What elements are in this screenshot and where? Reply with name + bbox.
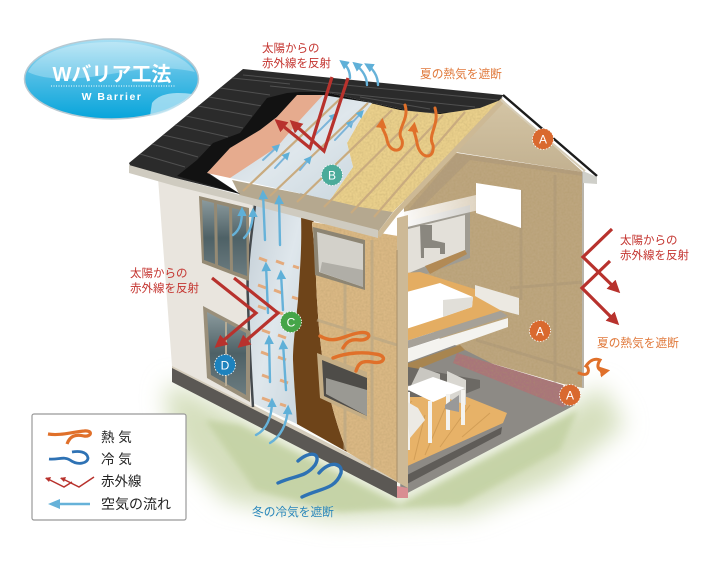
upper window xyxy=(199,196,249,281)
label: roof infrared reflection: 赤外線を反射 xyxy=(262,56,331,70)
ground: grass shadow xyxy=(165,382,625,520)
shingles xyxy=(129,69,503,194)
upper room xyxy=(404,205,470,282)
translucent upper wall layer xyxy=(252,200,312,250)
label: winter cold: 冬の冷気を遮断 xyxy=(252,505,334,519)
floor plate beam xyxy=(403,318,508,364)
air flow arrows xyxy=(233,62,378,443)
dim wood behind xyxy=(403,345,465,375)
foam insulated wall xyxy=(312,222,398,482)
chair xyxy=(420,225,445,258)
marker A middle: A xyxy=(536,324,544,338)
room floor 2 xyxy=(403,272,510,342)
marker A middle xyxy=(530,320,550,342)
legend: air flow xyxy=(48,496,171,512)
legend: heat xyxy=(48,430,132,445)
sill xyxy=(475,285,519,315)
lower window xyxy=(203,306,250,402)
right wall edge xyxy=(582,172,584,388)
marker C xyxy=(280,312,302,332)
light beam xyxy=(403,190,521,228)
legend: air flow: 空気の流れ xyxy=(101,496,171,512)
silver roof insulation xyxy=(230,95,372,200)
label: roof infrared reflection: 太陽からの xyxy=(262,42,320,55)
right side xyxy=(583,229,617,290)
roof air arrows xyxy=(263,112,362,170)
label: summer heat right: 夏の熱気を遮断 xyxy=(597,336,679,350)
house: left exterior wall cutaway xyxy=(158,178,398,498)
marker A upper: A xyxy=(539,132,547,146)
marker A lower: A xyxy=(566,388,574,402)
foam roof insulation xyxy=(330,99,503,212)
front corner post xyxy=(397,215,408,488)
label: wall infrared reflection: 赤外線を反射 xyxy=(130,281,199,295)
wall heat xyxy=(320,332,369,348)
eaves band xyxy=(129,165,378,238)
marker A upper xyxy=(532,128,554,150)
black underlay xyxy=(177,92,503,194)
upper room opening xyxy=(313,227,365,290)
badge: W Barrier: W Barrier xyxy=(82,91,142,103)
rafters xyxy=(243,97,465,217)
label: wall infrared reflection: 太陽からの xyxy=(130,267,188,280)
dark rug xyxy=(403,366,480,398)
legend: infrared: 赤外線 xyxy=(101,474,142,489)
lower kitchen opening xyxy=(317,353,367,420)
marker C: C xyxy=(287,316,296,330)
label: right infrared reflection: 太陽からの xyxy=(620,234,678,247)
marker D xyxy=(214,354,236,376)
legend: cold xyxy=(49,452,132,467)
right slope foam edge xyxy=(378,100,503,236)
white siding xyxy=(158,178,255,407)
bed xyxy=(403,283,473,330)
legend xyxy=(32,414,186,520)
right gable edge xyxy=(503,95,597,176)
wall xyxy=(212,278,256,345)
badge: W Barrier: Wバリア工法 xyxy=(53,63,171,86)
heat arrows xyxy=(320,105,606,374)
infrared reflection arrows xyxy=(212,77,617,345)
roof xyxy=(278,77,332,148)
legend: heat: 熱 気 xyxy=(101,430,132,445)
wood floor xyxy=(403,397,507,468)
window on back wall xyxy=(476,183,521,228)
interior: back wall and rooms xyxy=(397,100,583,498)
marker D: D xyxy=(221,358,230,372)
rising air at ridge xyxy=(342,62,350,78)
brown sheathing layer xyxy=(293,190,347,452)
insulation layer (silver with tape) xyxy=(248,205,304,424)
roof xyxy=(129,69,597,238)
pink sill insulation xyxy=(453,353,574,407)
badge: W Barrier xyxy=(24,39,198,119)
floor shadow xyxy=(403,427,502,485)
label: summer heat roof: 夏の熱気を遮断 xyxy=(420,67,502,81)
legend: cold: 冷 気 xyxy=(101,452,132,467)
cold air arrows xyxy=(278,454,341,497)
marker B: B xyxy=(328,168,336,182)
roof heat xyxy=(382,105,406,150)
marker B xyxy=(322,164,342,186)
marker A lower xyxy=(560,384,580,406)
attic gable wall xyxy=(400,100,583,215)
translucent zone under rafters xyxy=(232,180,393,232)
back wall foam xyxy=(404,150,583,388)
table and chairs xyxy=(404,367,466,450)
foundation xyxy=(172,366,397,498)
legend: infrared xyxy=(45,474,142,489)
pink layer xyxy=(207,95,323,178)
lower room xyxy=(400,345,575,497)
label: right infrared reflection: 赤外線を反射 xyxy=(620,248,689,262)
wall air arrows xyxy=(266,265,268,313)
right side heat xyxy=(579,359,606,374)
